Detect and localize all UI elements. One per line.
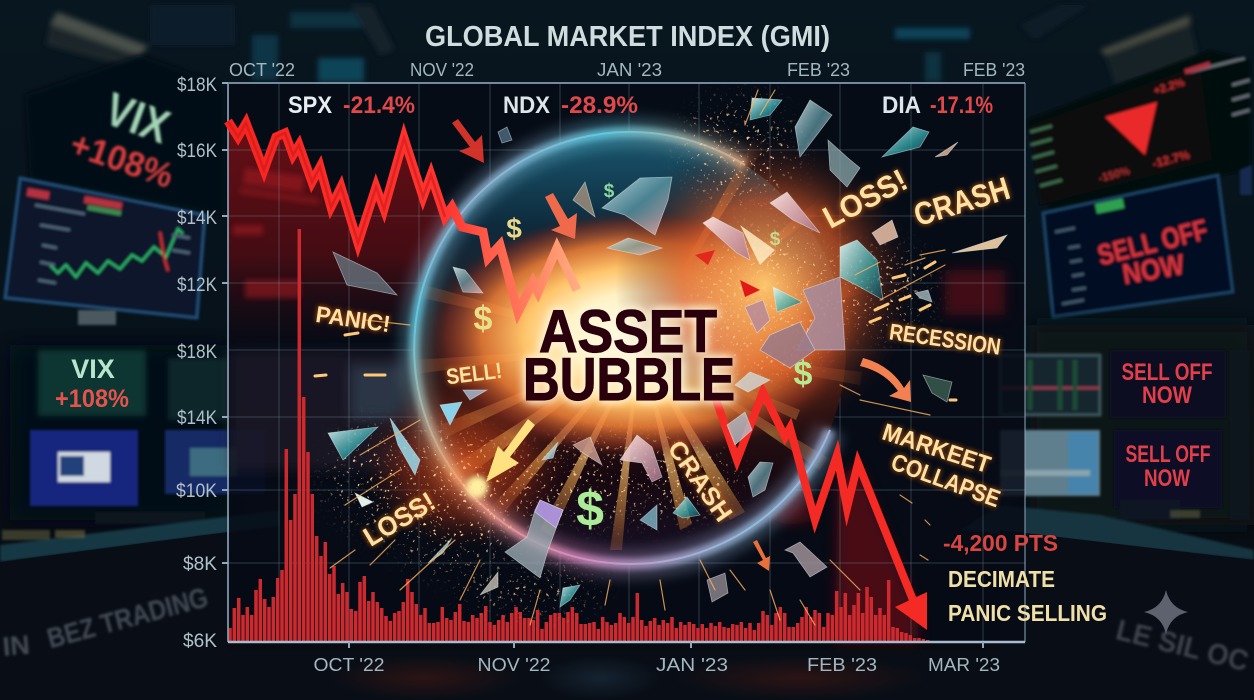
lower left VIX panel: +108% (55, 385, 129, 413)
floor reflections (228, 650, 1000, 700)
central title: ASSET BUBBLE (523, 298, 735, 413)
glowing callouts: CRASH (910, 170, 1014, 233)
VIX blurred screen label: VIX (99, 82, 177, 153)
y axis labels: $6K (183, 631, 217, 652)
loss callout text (943, 530, 1107, 626)
glowing callouts: RECESSION (888, 318, 1002, 360)
central title: ASSET BUBBLE: ASSET (539, 298, 717, 365)
glowing callouts: LOSS! (358, 486, 441, 552)
right lower monitors: SELL OFF (1126, 441, 1210, 468)
bottom date axis labels: MAR '23 (928, 655, 1000, 675)
top date axis labels: FEB '23 (963, 60, 1025, 80)
volume bars (230, 229, 928, 642)
lower left VIX panel: VIX (71, 354, 115, 384)
bottom date axis labels: JAN '23 (656, 655, 728, 675)
right upper screens: +2.2% (1152, 77, 1186, 97)
y axis labels: $16K (177, 141, 217, 162)
hot spot (466, 476, 488, 498)
red area under index line (228, 121, 918, 642)
y axis labels: $18K (177, 342, 217, 363)
loss callout text: -4,200 PTS (943, 530, 1058, 556)
glowing callouts: COLLAPSE (887, 449, 1004, 513)
bottom date axis labels (314, 655, 1000, 675)
dollar signs: $ (604, 181, 615, 202)
iridescent glass band (414, 132, 830, 564)
right monitor SELL OFF NOW (1043, 175, 1233, 317)
bubble interior (414, 132, 846, 564)
y axis labels: $12K (177, 275, 217, 296)
ceiling beams and lights (46, 5, 1200, 85)
glowing callouts (314, 162, 1014, 552)
right upper screens: -150% (1097, 165, 1131, 185)
right desk (960, 505, 1254, 700)
left upper dark screen (25, 55, 225, 215)
dollar signs: $ (474, 300, 493, 338)
arrow: yellow burst (486, 419, 535, 482)
right upper screens (1026, 50, 1252, 210)
thin highlight rim (414, 132, 830, 564)
blurred BEZ TRADING signage: BEZ TRADING (44, 581, 211, 654)
index stats: -17.1% (930, 92, 993, 119)
dollar signs: $ (506, 213, 522, 244)
VIX blurred screen label (65, 82, 178, 196)
right upper screens: -12.7% (1151, 147, 1191, 171)
glowing callouts: MARKEET (879, 419, 994, 479)
index stats (288, 92, 993, 119)
index stats: DIA (882, 92, 921, 119)
chart title: GLOBAL MARKET INDEX (GMI) (425, 21, 830, 53)
lower left VIX panel (10, 345, 230, 520)
iridescent rim (414, 132, 830, 564)
y axis labels (176, 75, 217, 652)
arrow: lower orange (753, 540, 770, 571)
bottom date axis labels: FEB '23 (807, 655, 877, 675)
loss callout text: PANIC SELLING (948, 600, 1107, 626)
bottom date axis labels: OCT '22 (314, 655, 384, 675)
plot background (229, 84, 1025, 642)
index stats: SPX (288, 92, 332, 119)
index stats: -28.9% (561, 92, 638, 119)
VIX blurred screen label: +108% (65, 124, 178, 196)
right monitor SELL OFF NOW: NOW (1120, 249, 1187, 291)
lower-left orange glow (360, 380, 570, 550)
small directional arrows (452, 119, 911, 571)
grid lines (229, 84, 1025, 642)
left chart monitor (5, 178, 205, 318)
burst rays (415, 124, 880, 550)
top date axis labels: JAN '23 (597, 60, 662, 80)
top date axis labels: NOV '22 (410, 60, 474, 80)
top date axis labels (229, 60, 1025, 80)
y axis labels: $8K (183, 554, 217, 575)
blurred BEZ TRADING signage: IN (1, 630, 31, 662)
right lower monitors: NOW (1144, 465, 1190, 492)
dollar signs (474, 181, 813, 537)
dollar signs: $ (794, 355, 813, 393)
y axis labels: $10K (176, 481, 217, 502)
burst glow (425, 210, 855, 460)
plot frame and axis ticks (222, 83, 1025, 648)
right burst glow (615, 135, 915, 435)
y axis labels: $14K (177, 208, 217, 229)
arrow: curved recession (860, 358, 911, 402)
central title: ASSET BUBBLE: BUBBLE (523, 346, 735, 413)
top date axis labels: FEB '23 (787, 60, 850, 80)
red index line descending (228, 121, 577, 312)
blurred right signage: LE SIL OC (1113, 614, 1252, 678)
bottom date axis labels: NOV '22 (478, 655, 550, 675)
asset bubble explosion (360, 124, 915, 564)
glass shards (328, 98, 1007, 607)
glowing callouts: PANIC! (314, 301, 392, 337)
spark speckle texture (310, 84, 948, 630)
sparks and debris streaks (315, 90, 956, 625)
loss callout text: DECIMATE (948, 566, 1055, 592)
y axis labels: $14K (177, 408, 217, 429)
left desk (0, 510, 280, 700)
right lower monitors (1000, 325, 1254, 525)
top date axis labels: OCT '22 (229, 60, 295, 80)
glowing callouts: LOSS! (817, 162, 913, 235)
dollar signs: $ (576, 481, 604, 537)
star watermark icon (1144, 590, 1188, 634)
red index line final plunge with arrow (712, 388, 927, 630)
right lower monitors: NOW (1142, 382, 1192, 409)
blue desk monitors (30, 430, 265, 524)
arrow head (895, 592, 927, 630)
glowing callouts: CRASH (662, 436, 737, 527)
index stats: -21.4% (343, 92, 415, 119)
dollar signs: $ (770, 229, 781, 250)
arrow: inside bubble (545, 193, 577, 239)
index stats: NDX (503, 92, 550, 119)
arrow: upper red (452, 119, 484, 163)
glowing callouts: SELL! (445, 358, 503, 389)
right monitor SELL OFF NOW: SELL OFF (1095, 214, 1211, 272)
blurred BEZ TRADING signage (1, 581, 211, 662)
y axis labels: $18K (177, 75, 217, 96)
right lower monitors: SELL OFF (1122, 359, 1212, 386)
